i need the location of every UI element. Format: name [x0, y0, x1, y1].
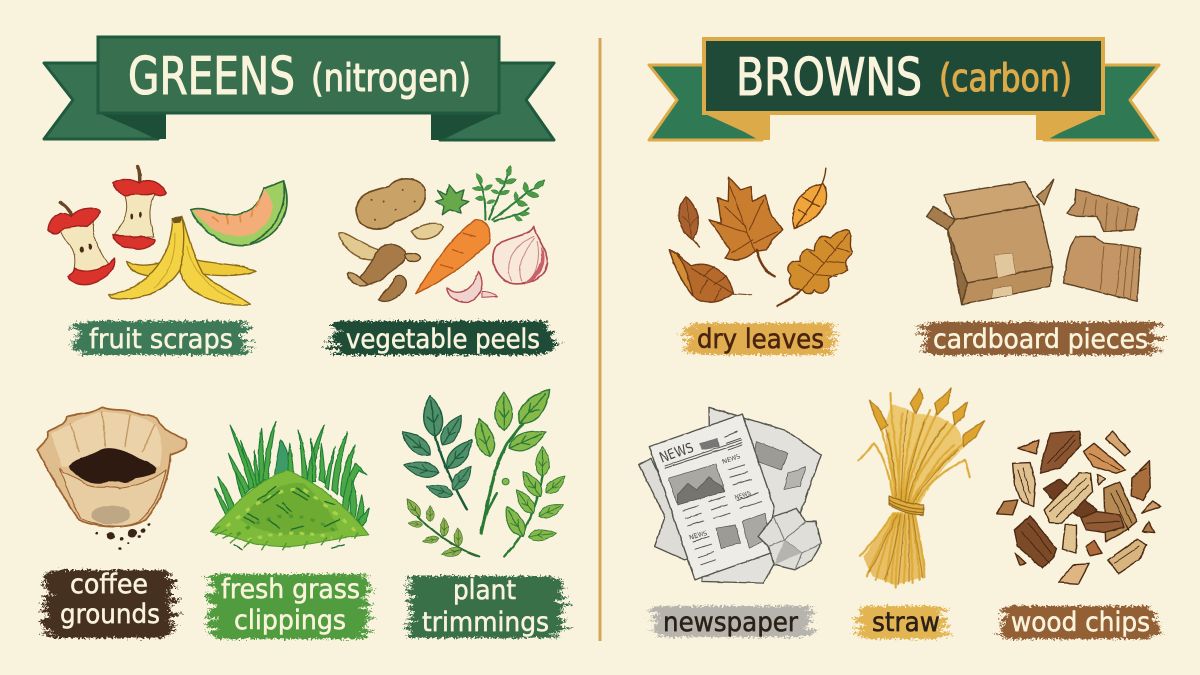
- panel: browns: [639, 39, 1161, 639]
- icon: fresh grass clippings: [211, 422, 369, 550]
- banner: greens (nitrogen): GREENS: [128, 47, 295, 107]
- panel: greens: [37, 37, 569, 639]
- banner: browns (carbon): BROWNS: [736, 48, 922, 108]
- label: vegetable peels: vegetable peels: [346, 324, 540, 355]
- label: plant trimmings: plant: [453, 575, 516, 606]
- label: coffee grounds: grounds: [60, 599, 160, 630]
- label: fresh grass clippings: clippings: [234, 605, 346, 636]
- label: cardboard pieces: cardboard pieces: [933, 324, 1148, 355]
- label: plant trimmings: trimmings: [422, 607, 549, 638]
- icon: plant trimmings: [397, 383, 569, 559]
- center divider: [598, 38, 602, 641]
- banner: browns (carbon): (carbon): [939, 56, 1072, 100]
- icon: vegetable peels: [339, 165, 548, 302]
- label: coffee grounds: coffee: [70, 569, 148, 600]
- icon: cardboard box and pieces: [927, 180, 1141, 305]
- banner: greens (nitrogen): (nitrogen): [311, 56, 471, 100]
- icon: dry leaves: [669, 168, 853, 306]
- label: coffee grounds: [46, 569, 172, 638]
- label: fresh grass clippings: fresh grass: [221, 574, 360, 605]
- label: fresh grass clippings: [210, 574, 368, 639]
- icon: newspaper: NEWS: [657, 440, 696, 466]
- icon: straw bundle: [859, 388, 985, 587]
- label: newspaper: newspaper: [663, 607, 799, 638]
- banner: greens (nitrogen): [44, 37, 554, 140]
- icon: coffee filter with grounds: [37, 407, 187, 550]
- icon: fruit scraps: [48, 167, 287, 305]
- icon: newspaper: NEWS: [734, 490, 752, 501]
- icon: wood chips: [997, 431, 1161, 584]
- icon: newspaper: NEWS: [721, 453, 742, 466]
- label: dry leaves: dry leaves: [697, 324, 824, 355]
- label: plant trimmings: [410, 575, 562, 638]
- banner: browns (carbon): [649, 39, 1159, 140]
- label: wood chips: wood chips: [1011, 607, 1150, 638]
- icon: newspaper: [639, 407, 821, 583]
- label: fruit scraps: fruit scraps: [89, 324, 233, 355]
- label: straw: straw: [872, 607, 940, 638]
- icon: newspaper: NEWS: [688, 530, 708, 542]
